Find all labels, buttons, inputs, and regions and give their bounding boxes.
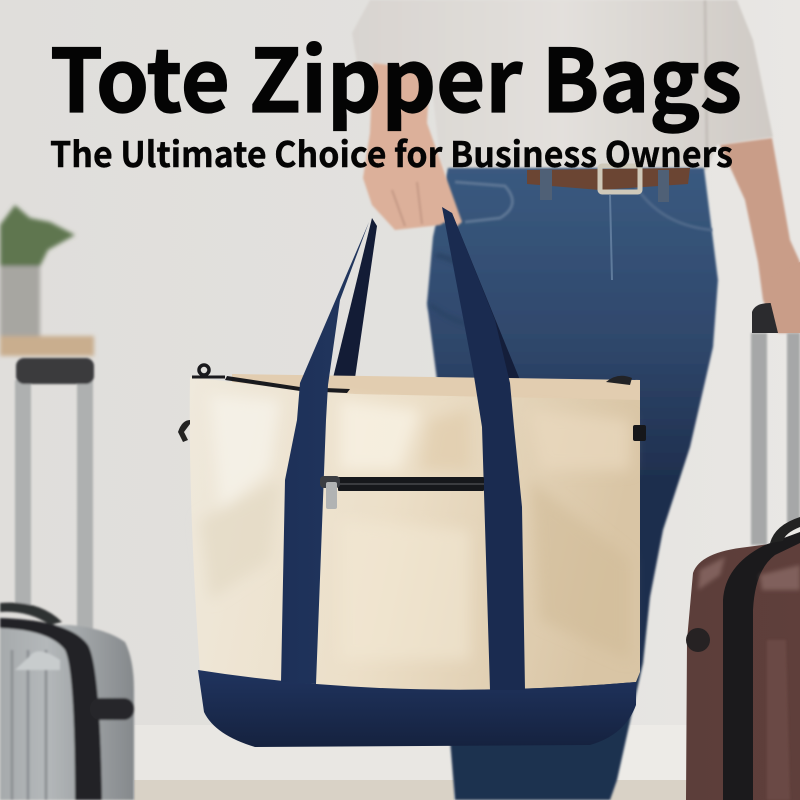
- maroon suitcase right: [686, 262, 800, 800]
- side hardware: [178, 420, 646, 442]
- tote bag: [178, 207, 646, 747]
- right front handle strap: [442, 207, 525, 690]
- back rim of bag: [232, 374, 640, 402]
- person: shirt: [352, 0, 773, 172]
- canvas body: [190, 377, 640, 690]
- person: jeans: [427, 168, 718, 800]
- brown belt and buckle: [527, 166, 690, 202]
- canvas wrinkles: [200, 395, 630, 660]
- top zipper and ring: [192, 365, 632, 393]
- left front handle strap: [281, 222, 369, 684]
- back handle strap dark: [333, 212, 520, 380]
- left arm and hand gripping handles: [363, 63, 462, 230]
- right arm and hand: [720, 138, 800, 333]
- zipper pocket: [320, 476, 484, 509]
- navy base: [198, 670, 636, 747]
- side table with plant: [0, 205, 94, 356]
- subtitle: The Ultimate Choice for Business Owners: [50, 127, 733, 178]
- silver suitcase left: [0, 358, 134, 800]
- title: Tote Zipper Bags: [50, 12, 742, 138]
